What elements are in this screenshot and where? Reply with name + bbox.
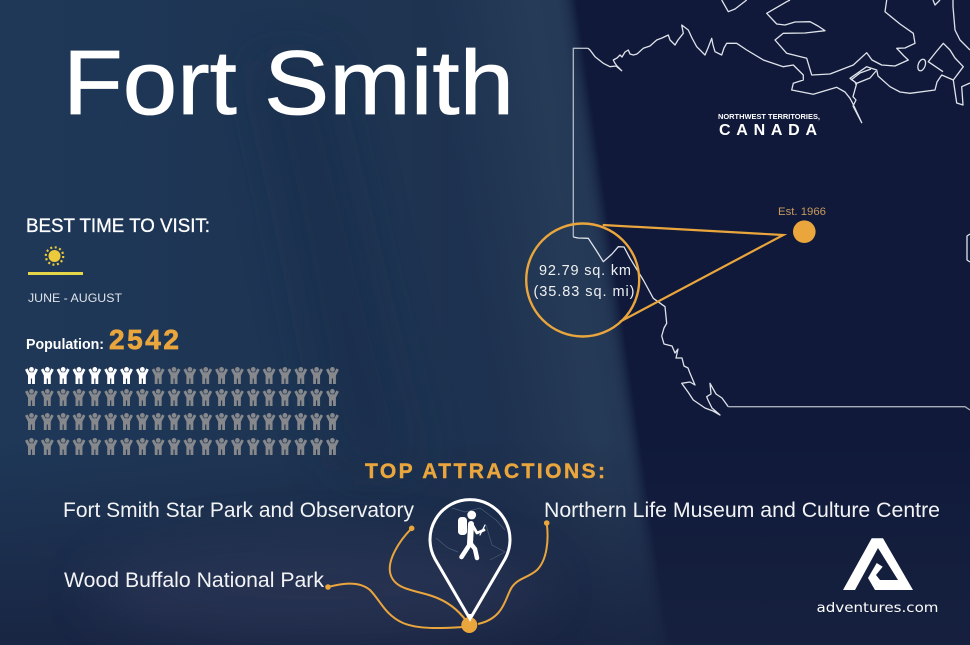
location marker: Est. 1966 (778, 206, 826, 243)
months label: JUNE - AUGUST (28, 291, 123, 305)
logo: adventures.com: adventures.com (816, 600, 938, 616)
map outline (573, 0, 970, 415)
attraction: Northern Life Museum and Culture Centre: Northern Life Museum and Culture Centre (544, 499, 940, 522)
icon: map pin with hiker (430, 500, 510, 633)
map label: Northwest Territories, Canada (718, 114, 820, 139)
callout: town area magnifier: 92.79 sq. km (539, 263, 631, 279)
highlighted people (25, 367, 149, 384)
hiker figure (458, 511, 485, 558)
location marker: Est. 1966: Est. 1966 (778, 206, 826, 218)
population label: Population: (26, 336, 104, 353)
icon: sun (46, 247, 63, 265)
season bar (28, 272, 83, 275)
callout: town area magnifier (526, 224, 783, 336)
attraction: Fort Smith Star Park and Observatory: Fort Smith Star Park and Observatory (63, 499, 414, 522)
heading: top attractions: TOP ATTRACTIONS: (365, 460, 605, 483)
pictogram: population people (25, 367, 339, 455)
attraction: Wood Buffalo National Park: Wood Buffalo National Park (64, 569, 324, 592)
heading: best time to visit: BEST TIME TO VISIT: (26, 216, 210, 237)
connector lines to pin (326, 521, 548, 628)
map label: Northwest Territories, Canada: NORTHWEST TERRITORIES, (718, 114, 820, 121)
remaining people (25, 367, 339, 455)
title: Fort Smith (63, 33, 514, 134)
callout: town area magnifier: (35.83 sq. mi) (534, 284, 634, 300)
logo: adventures.com (816, 538, 938, 616)
population number: 2542 (109, 324, 179, 355)
map label: Northwest Territories, Canada: CANADA (719, 122, 817, 139)
